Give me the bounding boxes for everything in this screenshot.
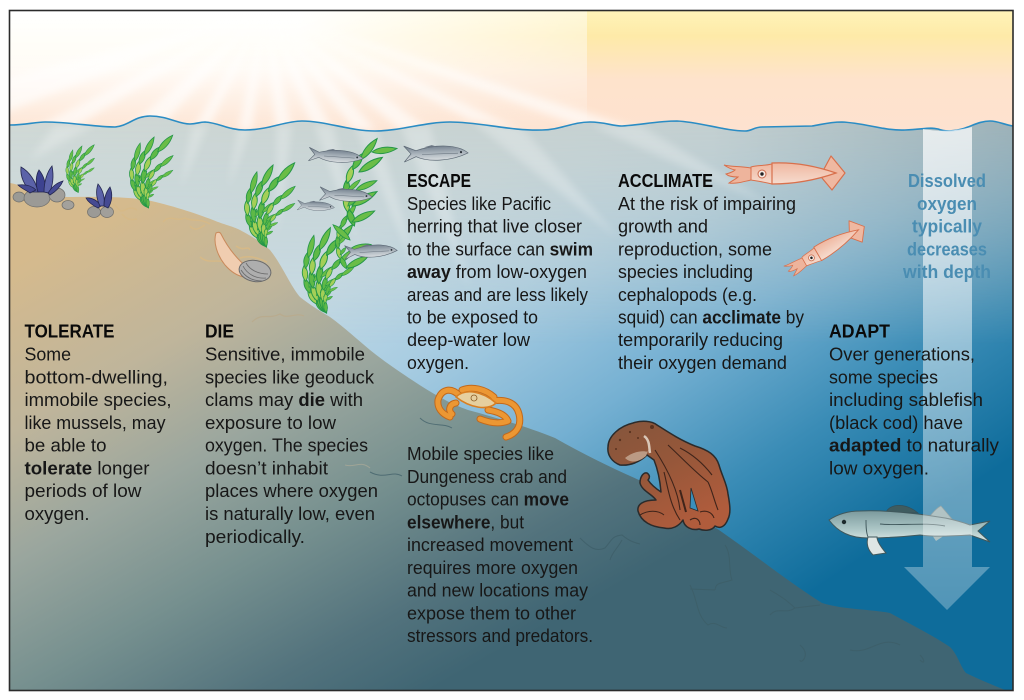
- text block: mobile species: and new locations may: [407, 580, 588, 600]
- text block: adapt: including sablefish: [829, 390, 983, 410]
- text block: escape: [407, 170, 593, 373]
- text block: dissolved oxygen note: decreases: [907, 240, 987, 260]
- text block: adapt: some species: [829, 367, 938, 387]
- text block: mobile species: increased movement: [407, 535, 573, 555]
- text block: tolerate: immobile species,: [24, 390, 172, 410]
- text block: acclimate: their oxygen demand: [618, 353, 787, 373]
- icon: kelp cluster 3: [233, 156, 297, 251]
- text block: dissolved oxygen note: typically: [912, 217, 982, 237]
- text block: tolerate: Some: [24, 345, 71, 365]
- icon: octopus: [608, 421, 730, 530]
- text block: tolerate: oxygen.: [24, 504, 90, 524]
- text block: die: periodically.: [205, 527, 305, 547]
- text block: acclimate: reproduction, some: [618, 240, 772, 260]
- text block: tolerate: be able to: [24, 436, 107, 456]
- text block: acclimate: species including: [618, 262, 753, 282]
- text block: tolerate: like mussels, may: [24, 413, 166, 433]
- text block: mobile species: expose them to other: [407, 603, 576, 623]
- text block: tolerate: periods of low: [24, 481, 143, 501]
- text block: dissolved oxygen note: [902, 171, 991, 282]
- text block: mobile species: octopuses can move: [407, 490, 569, 510]
- text block: escape: to the surface can swim: [407, 240, 593, 260]
- text block: tolerate: bottom-dwelling,: [24, 367, 168, 387]
- text block: mobile species: Dungeness crab and: [407, 467, 567, 487]
- icon: kelp cluster 1: [59, 141, 96, 195]
- text block: die: [205, 320, 378, 547]
- text block: die: oxygen. The species: [205, 436, 368, 456]
- text block: dissolved oxygen note: oxygen: [917, 194, 977, 214]
- icon: squid: [724, 156, 845, 190]
- text block: adapt: ADAPT: [829, 320, 891, 342]
- text block: die: exposure to low: [205, 413, 337, 433]
- text block: escape: deep-water low: [407, 330, 531, 350]
- text block: adapt: (black cod) have: [829, 413, 963, 433]
- text block: tolerate: TOLERATE: [24, 320, 114, 342]
- icon: kelp cluster 2: [120, 130, 175, 212]
- text block: adapt: low oxygen.: [829, 458, 929, 478]
- text block: mobile species: Mobile species like: [407, 444, 554, 464]
- text block: acclimate: squid) can acclimate by: [618, 308, 804, 328]
- text block: dissolved oxygen note: with depth: [902, 262, 991, 282]
- text block: escape: to be exposed to: [407, 308, 538, 328]
- text block: die: is naturally low, even: [205, 504, 375, 524]
- seafloor: [10, 183, 1005, 690]
- text block: escape: areas and are less likely: [407, 285, 588, 305]
- text block: escape: oxygen.: [407, 353, 469, 373]
- panel: sky background: [0, 10, 1013, 140]
- text block: die: places where oxygen: [205, 481, 378, 501]
- text block: tolerate: [24, 320, 172, 524]
- text block: escape: ESCAPE: [407, 170, 471, 191]
- text block: acclimate: At the risk of impairing: [618, 194, 796, 214]
- text block: die: DIE: [205, 320, 234, 342]
- icon: crab: [438, 388, 520, 437]
- text block: acclimate: temporarily reducing: [618, 330, 783, 350]
- icon: geoduck clam: [215, 232, 273, 284]
- icon: sablefish: [829, 505, 990, 555]
- text block: dissolved oxygen note: Dissolved: [908, 171, 986, 191]
- text block: mobile species: stressors and predators.: [407, 626, 593, 646]
- text block: adapt: adapted to naturally: [829, 436, 999, 456]
- icon: squid diving: [780, 216, 871, 282]
- text block: escape: herring that live closer: [407, 217, 582, 237]
- text block: die: species like geoduck: [205, 367, 375, 387]
- text block: die: Sensitive, immobile: [205, 345, 365, 365]
- icon: tall kelp: [289, 134, 397, 319]
- water surface line: [10, 116, 1013, 131]
- text block: adapt: Over generations,: [829, 345, 975, 365]
- icon: herring school: [297, 144, 468, 259]
- text block: mobile species: [407, 444, 593, 646]
- text block: acclimate: growth and: [618, 217, 708, 237]
- text block: escape: away from low-oxygen: [407, 262, 587, 282]
- burrow tracks: [163, 218, 370, 468]
- text block: acclimate: ACCLIMATE: [618, 170, 713, 191]
- text block: mobile species: elsewhere, but: [407, 512, 524, 532]
- text block: escape: Species like Pacific: [407, 194, 551, 214]
- text block: adapt: [829, 320, 999, 478]
- text block: acclimate: cephalopods (e.g.: [618, 285, 757, 305]
- text block: die: clams may die with: [205, 390, 363, 410]
- text block: acclimate: [618, 170, 804, 373]
- icon: mussels and rocks: [13, 166, 114, 218]
- arrow: dissolved oxygen decreases with depth: [904, 127, 990, 610]
- text block: mobile species: requires more oxygen: [407, 558, 578, 578]
- text block: die: doesn’t inhabit: [205, 458, 328, 478]
- text block: tolerate: tolerate longer: [24, 458, 150, 478]
